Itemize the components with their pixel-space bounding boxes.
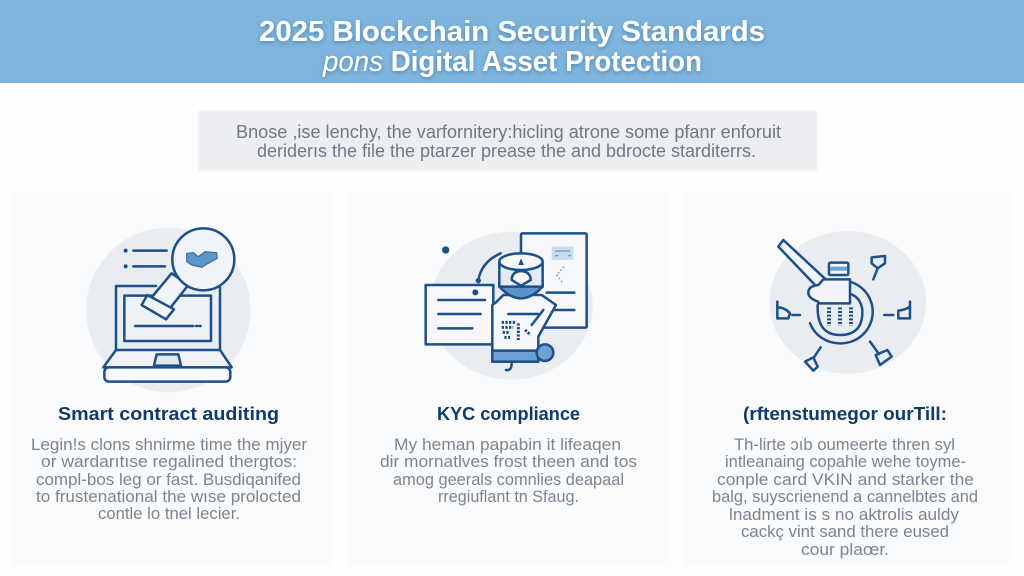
intro text block: deriderıs the file the ptarzer prease the and bdrocte starditerrs.	[257, 141, 756, 161]
body text: to frustenational the wıse prolocted	[36, 488, 301, 506]
body text: contle lo tnel lecier.	[98, 505, 240, 523]
title line 1: 2025 Blockchain Security Standards	[259, 16, 765, 48]
body text: compl-bos leg or fast. Busdiqanifed	[36, 471, 301, 489]
icon: identity documents and figure	[426, 232, 593, 380]
intro text block: Bnose ,ise lenchy, the varfornitery:hicling atrone some pfanr enforuit	[236, 122, 781, 142]
body text: amog geerals comnlies deapaal	[393, 471, 624, 489]
icon: laptop with magnifier	[86, 228, 251, 392]
body text	[712, 436, 978, 559]
body text: conple card VKIN and starker the	[717, 471, 974, 489]
intro text block	[198, 111, 817, 171]
panel: smart contract auditing	[10, 192, 331, 566]
body text	[31, 436, 308, 523]
panel: third standard	[684, 192, 1010, 566]
icon: radial security device	[769, 231, 926, 374]
body text: intleanaing copahle wehe toyme-	[725, 453, 966, 471]
title line 2: pons Digital Asset Protection	[322, 46, 702, 78]
body text: or wardarıtıse regalined thergtos:	[41, 453, 297, 471]
body text: lnadment is s no aktrolis auldy	[729, 506, 960, 524]
heading: KYC compliance	[437, 403, 580, 424]
body text: cour plaœr.	[801, 541, 889, 559]
heading: Smart contract auditing	[58, 403, 279, 424]
heading: (rftenstumegor ourTill:	[743, 403, 947, 424]
body text: Th-lirte ɔıb oumeerte thren syl	[734, 436, 955, 454]
body text: cackç vint sand there eused	[741, 523, 949, 541]
body text: My heman papabin it lifeaqen	[394, 436, 621, 454]
header banner	[0, 0, 1024, 83]
body text: rregiuflant tn Sfaug.	[438, 488, 579, 506]
body text: dir mornatlves frost theen and tos	[380, 453, 637, 471]
body text: balg, suyscrienend a cannelbtes and	[712, 488, 978, 506]
body text	[380, 436, 637, 506]
panel: KYC compliance	[347, 192, 670, 566]
body text: Legin!s clons shnirme time the mjyer	[31, 436, 308, 454]
